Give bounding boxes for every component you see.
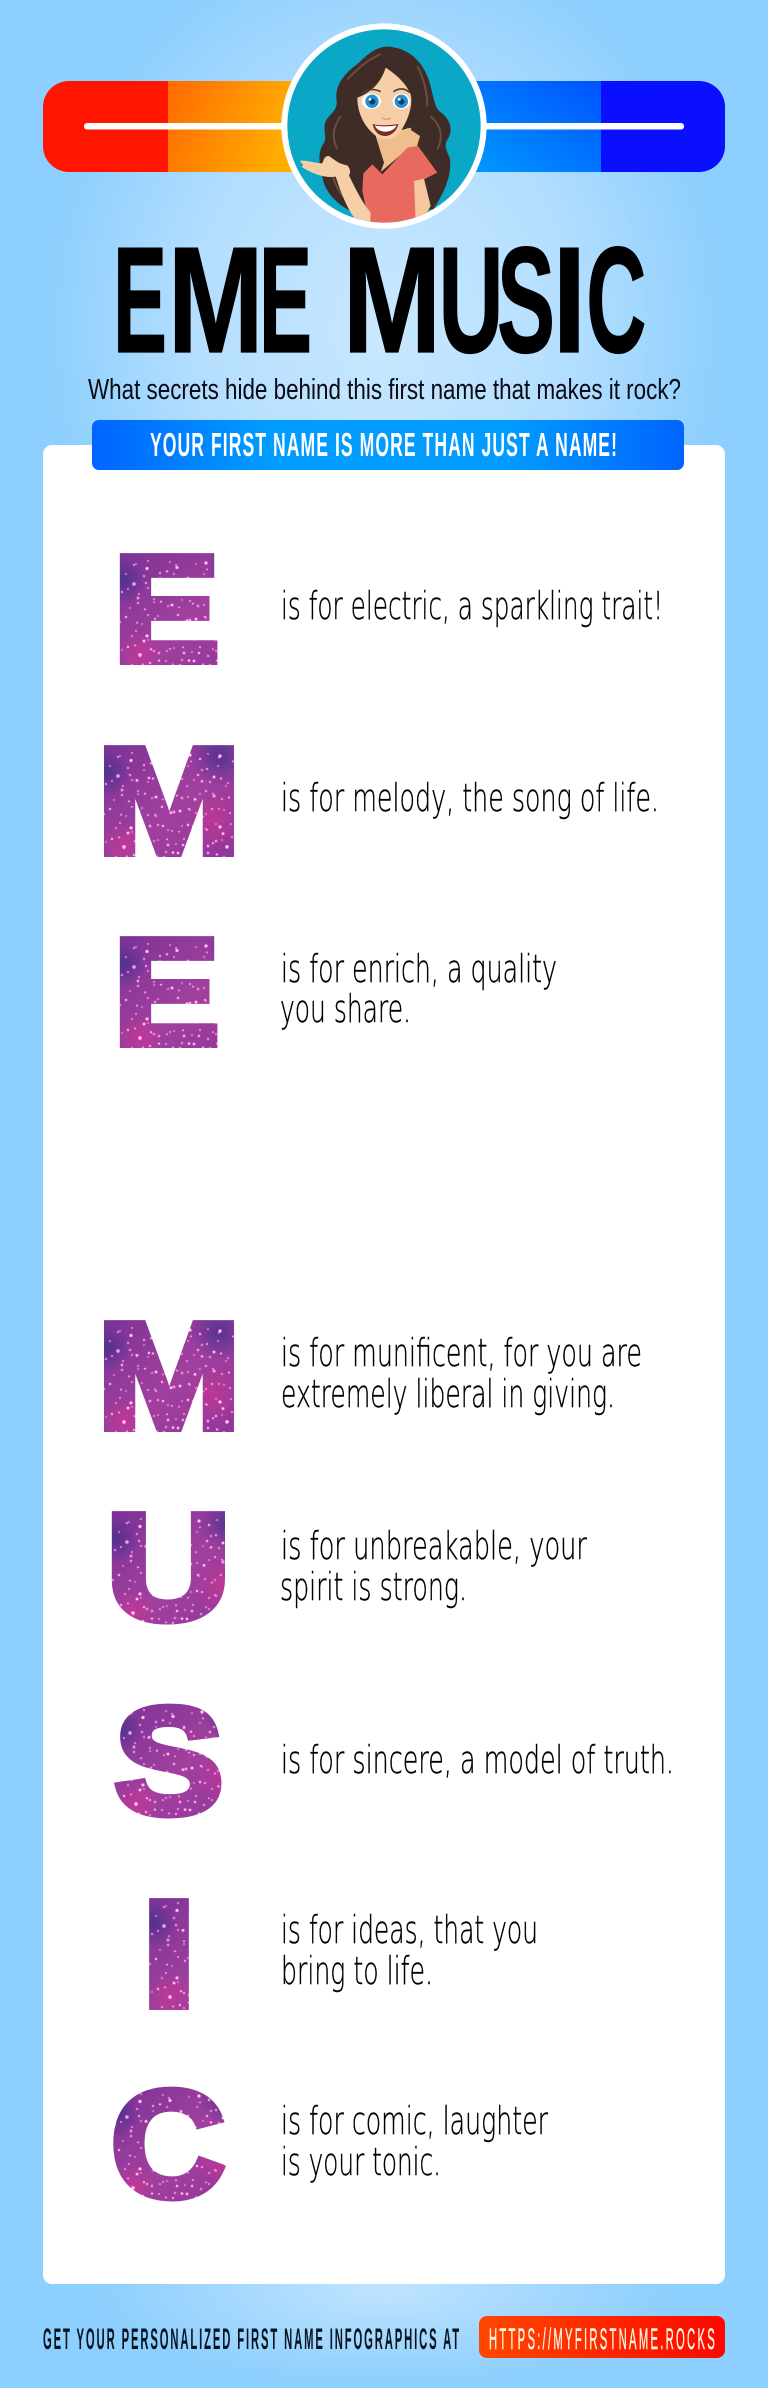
letter U: U (106, 1482, 231, 1651)
banner (92, 420, 684, 470)
title: E (113, 215, 167, 384)
text: comic: is for comic, laughter (281, 2099, 548, 2143)
header gradient bar (43, 81, 725, 172)
letter E: E (113, 907, 219, 1076)
footer url button (479, 2316, 725, 2358)
text: comic (281, 2099, 548, 2184)
text: enrich: is for enrich, a quality (281, 947, 557, 991)
row 4: M (97, 1291, 642, 1460)
row 7: I (141, 1869, 538, 2038)
row 2: M (97, 716, 659, 885)
title: I (552, 215, 586, 384)
content panel (43, 445, 725, 2284)
text: ideas: bring to life. (281, 1949, 433, 1993)
row 3: E (113, 907, 557, 1076)
text: enrich: you share. (280, 987, 411, 1031)
row 1: E (113, 524, 663, 693)
row 8: C (111, 2059, 548, 2228)
letter I: I (141, 1869, 197, 2038)
text: ideas (281, 1908, 538, 1993)
title: E (259, 215, 312, 384)
letter M: M (97, 716, 241, 885)
title: U (438, 215, 504, 384)
letter E: E (113, 524, 219, 693)
letter M: M (97, 1291, 241, 1460)
avatar: cartoon woman in circle (281, 23, 487, 229)
title: S (497, 215, 555, 384)
text: unbreakable (280, 1524, 587, 1609)
text: comic: is your tonic. (281, 2140, 441, 2184)
letter C: C (111, 2059, 225, 2228)
title: M (342, 215, 442, 384)
text: enrich (280, 947, 557, 1031)
text: ideas: is for ideas, that you (281, 1908, 538, 1952)
text: unbreakable: spirit is strong. (280, 1565, 467, 1609)
title: M (168, 215, 264, 384)
text: unbreakable: is for unbreakable, your (281, 1524, 587, 1568)
row 6: S (114, 1676, 674, 1845)
letter S: S (114, 1676, 224, 1845)
title: C (586, 215, 646, 384)
text: munificent (281, 1331, 642, 1416)
row 5: U (106, 1482, 587, 1651)
